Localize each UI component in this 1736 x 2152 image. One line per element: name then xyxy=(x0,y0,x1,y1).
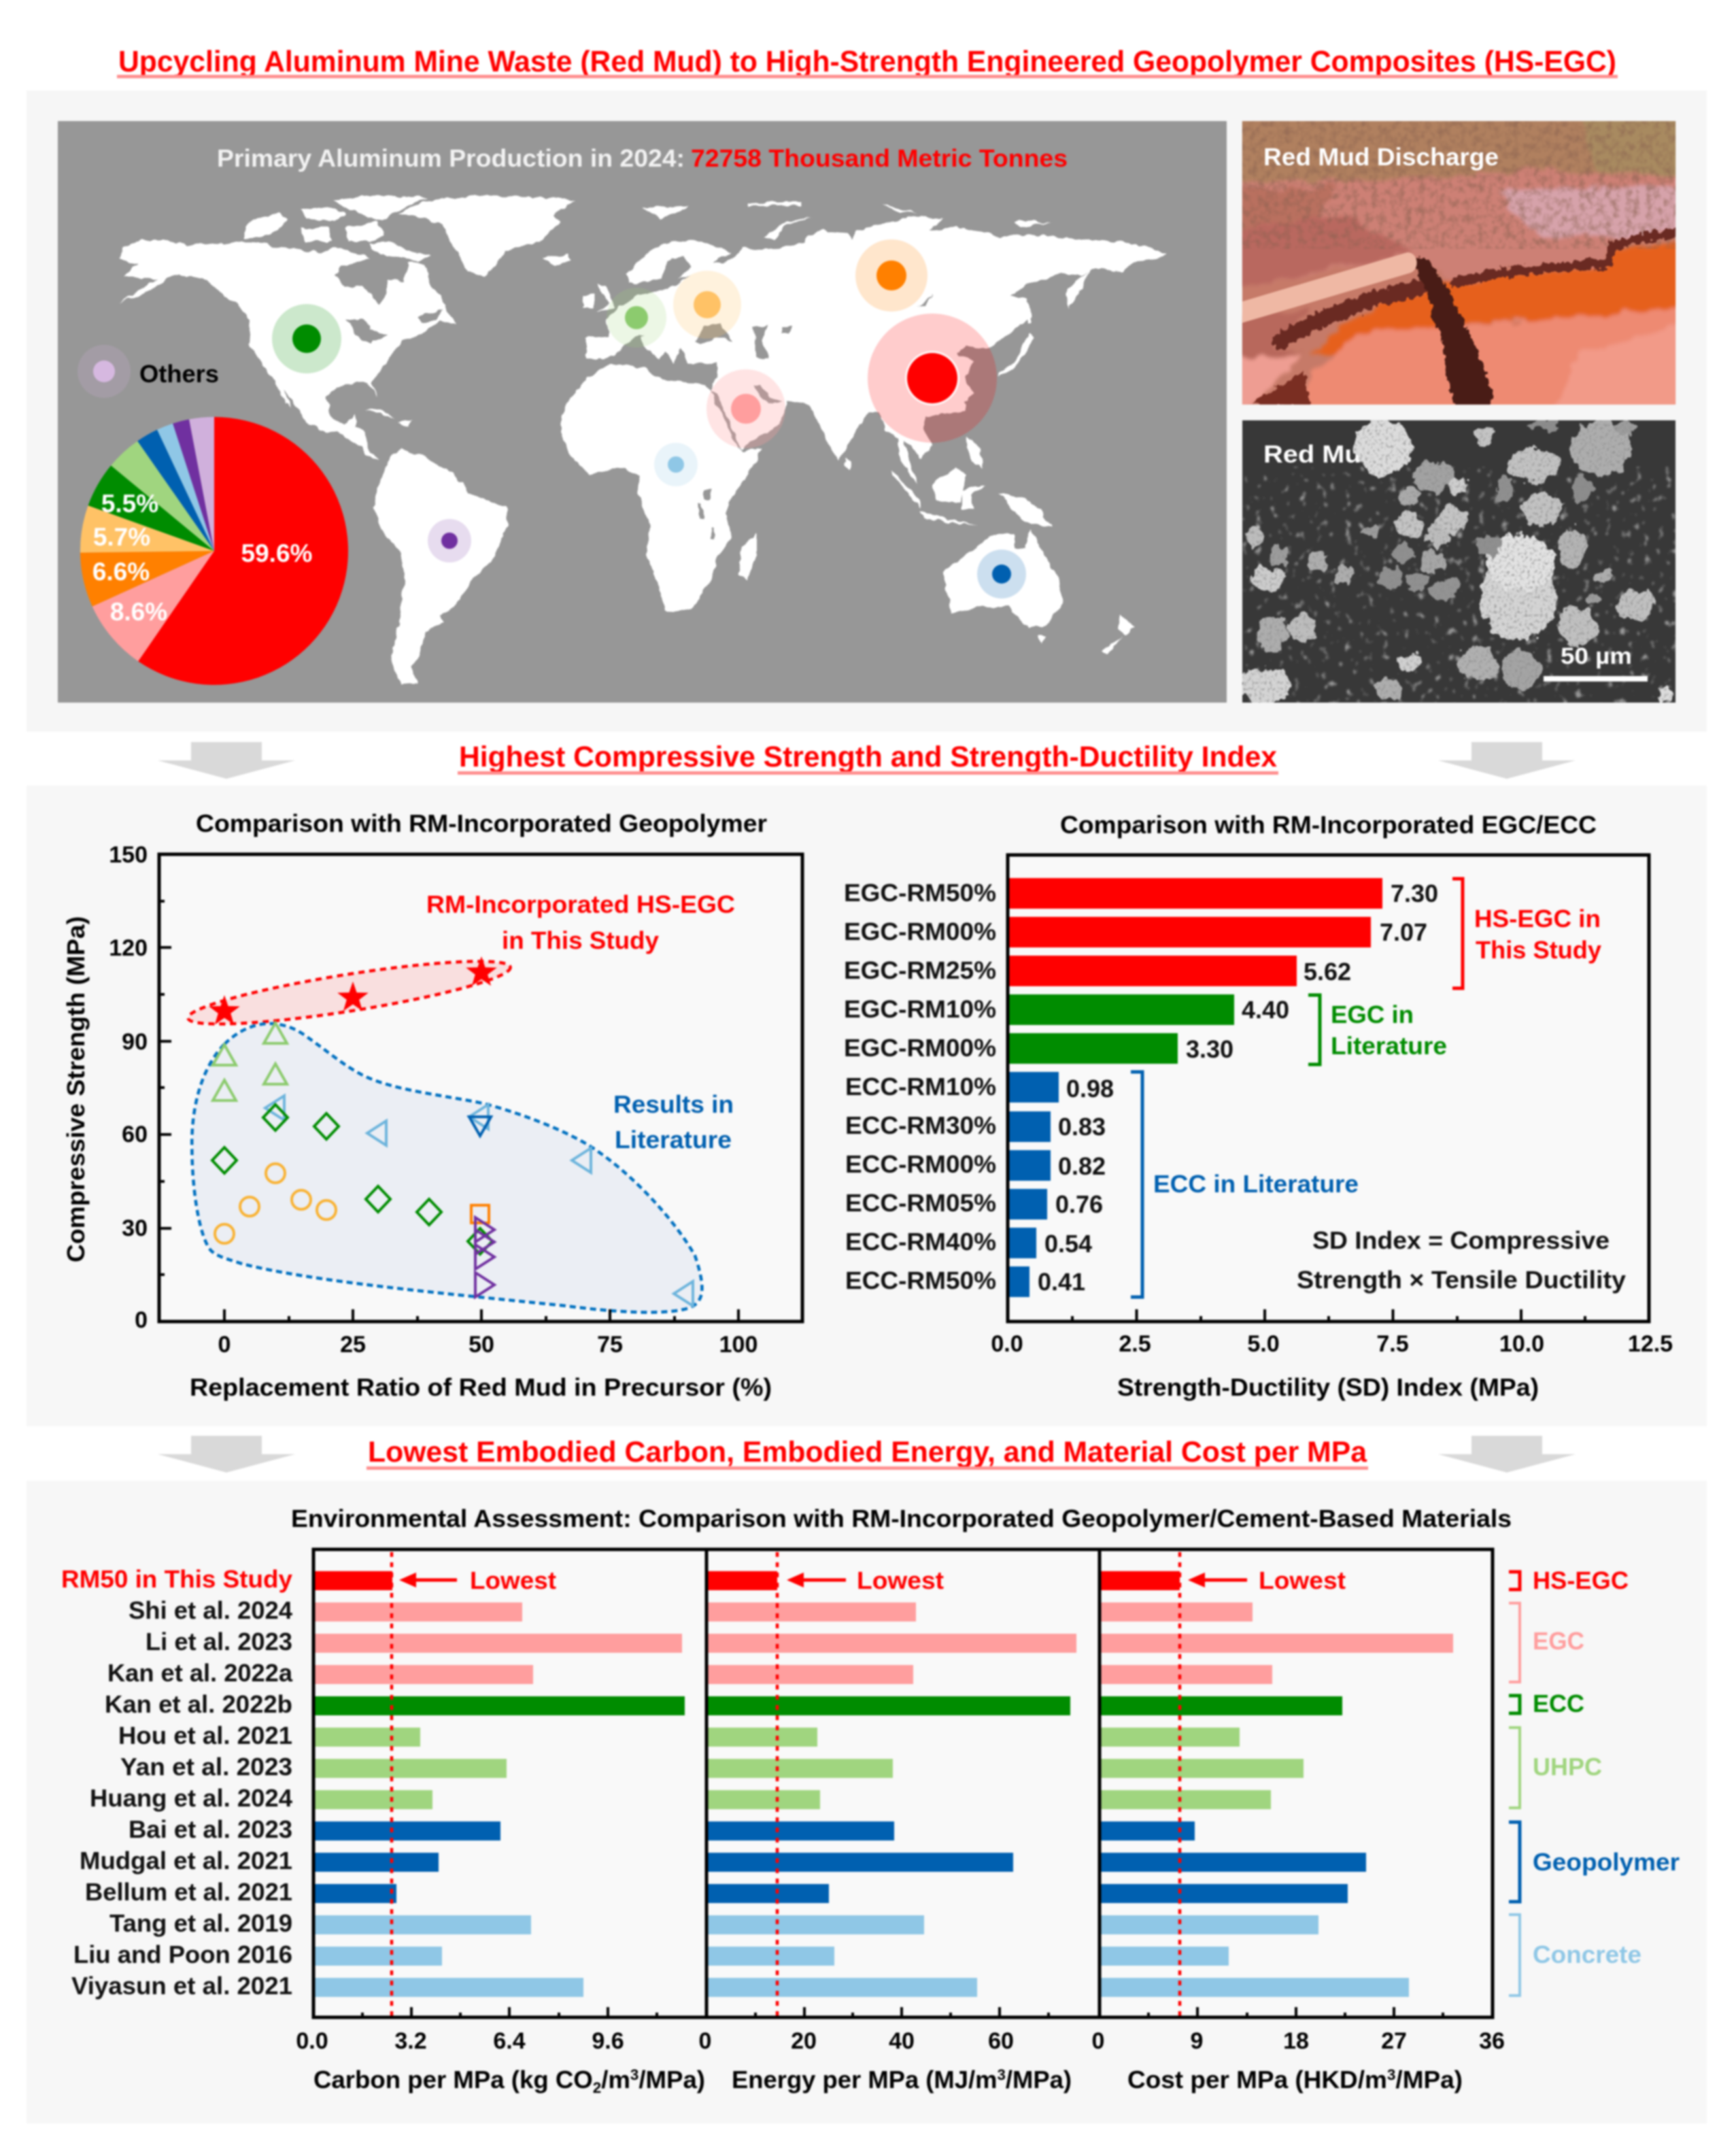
photo: red mud SEM micrograph xyxy=(1240,418,1675,706)
environmental tick labels: 40 xyxy=(889,2028,915,2054)
bar x tick labels: 5.0 xyxy=(1247,1331,1280,1357)
study labels: Huang et al. 2024 xyxy=(90,1784,292,1812)
group bracket: Geopolymer: Geopolymer xyxy=(1533,1848,1680,1876)
study labels xyxy=(61,1565,293,2000)
environmental tick labels: 36 xyxy=(1479,2028,1505,2054)
bar x tick labels xyxy=(991,1331,1673,1357)
marker: Brazil xyxy=(428,519,471,562)
axis title: carbon: Carbon per MPa (kg CO xyxy=(313,2066,588,2094)
bar category labels: EGC-RM00% xyxy=(844,918,996,945)
markers: diamonds xyxy=(212,1105,492,1254)
heading: strength: Highest Compressive Strength and Strength-Ductility Index xyxy=(459,741,1277,773)
annotation: this study: in This Study xyxy=(502,926,659,954)
map heading value: 72758 Thousand Metric Tonnes xyxy=(691,144,1068,172)
scatter y tick labels: 90 xyxy=(122,1029,148,1055)
environmental tick labels: 18 xyxy=(1283,2028,1309,2054)
bar category labels: ECC-RM10% xyxy=(845,1073,996,1100)
arrow: down right 2 xyxy=(1438,1436,1576,1473)
scatter y tick labels: 30 xyxy=(122,1215,148,1241)
photo: red mud discharge xyxy=(1240,120,1677,406)
bar category labels: EGC-RM00% xyxy=(844,1034,996,1062)
group bracket: ECC xyxy=(1509,1689,1584,1717)
bracket: HS-EGC group xyxy=(1452,879,1601,988)
title: Upcycling Aluminum Mine Waste (Red Mud) to High-Strength Engineered Geopolymer Composites (HS-EGC) xyxy=(118,45,1616,78)
study labels: Bellum et al. 2021 xyxy=(85,1878,292,1906)
bar category labels: ECC-RM50% xyxy=(845,1266,996,1294)
environmental tick labels: 9.6 xyxy=(592,2028,624,2054)
group bracket: Geopolymer xyxy=(1509,1822,1680,1902)
bar values: 0.82 xyxy=(1058,1152,1106,1180)
axis title: carbon: /m xyxy=(601,2066,630,2094)
world landmasses xyxy=(118,196,1166,686)
panel: mechanical comparison xyxy=(27,786,1707,1426)
environmental frame xyxy=(313,1549,1493,2017)
axis title: carbon: /MPa) xyxy=(639,2066,705,2094)
bar x tick labels: 12.5 xyxy=(1628,1331,1673,1357)
study labels: Tang et al. 2019 xyxy=(109,1909,292,1937)
study labels: Hou et al. 2021 xyxy=(118,1721,292,1749)
scatter x tick labels: 0 xyxy=(218,1332,231,1358)
red highlight ellipse xyxy=(185,949,513,1037)
pie label 8.6%: 8.6% xyxy=(110,598,167,626)
axis title: cost: 3 xyxy=(1387,2066,1395,2083)
marker: Russia xyxy=(855,239,927,312)
arrow: down left 1 xyxy=(158,742,295,779)
environmental tick labels: 60 xyxy=(988,2028,1014,2054)
map heading: Primary Aluminum Production in 2024: xyxy=(217,144,685,172)
study labels: Kan et al. 2022a xyxy=(107,1659,293,1687)
markers: circles xyxy=(215,1164,336,1243)
group bracket: EGC: EGC xyxy=(1533,1627,1584,1655)
environmental tick labels: 20 xyxy=(791,2028,817,2054)
marker: China xyxy=(868,314,997,443)
bar x tick labels: 2.5 xyxy=(1119,1331,1151,1357)
world map panel xyxy=(58,121,1227,703)
bar category labels: ECC-RM05% xyxy=(845,1189,996,1217)
group bracket: Concrete xyxy=(1509,1915,1641,1996)
bar values: 5.62 xyxy=(1304,958,1351,986)
arrow: down right 1 xyxy=(1438,742,1576,779)
bars: cost xyxy=(1100,1571,1453,1997)
bar x axis title: Strength-Ductility (SD) Index (MPa) xyxy=(1117,1373,1539,1401)
study labels: Bai et al. 2023 xyxy=(129,1815,292,1843)
study labels: Viyasun et al. 2021 xyxy=(71,1972,292,2000)
callout: lowest carbon xyxy=(399,1566,556,1594)
bar category labels: ECC-RM30% xyxy=(845,1111,996,1139)
marker: Africa xyxy=(654,443,698,486)
markers: left triangles xyxy=(265,1096,693,1306)
marker: down triangle xyxy=(469,1117,491,1136)
environmental tick labels: 0 xyxy=(1092,2028,1104,2054)
scatter chart xyxy=(62,809,802,1401)
callout: lowest energy: Lowest xyxy=(857,1566,944,1594)
axis title: energy: 3 xyxy=(998,2066,1006,2083)
bar category labels: ECC-RM00% xyxy=(845,1150,996,1178)
pie label 6.6%: 6.6% xyxy=(92,558,150,586)
scale bar xyxy=(1544,643,1648,682)
scatter y tick labels: 0 xyxy=(135,1307,148,1333)
bracket: ECC literature group: ECC in Literature xyxy=(1153,1170,1359,1198)
marker: Others legend xyxy=(78,345,219,398)
annotation: this study xyxy=(426,890,735,954)
study labels: Mudgal et al. 2021 xyxy=(80,1847,292,1874)
SD index note: Strength × Tensile Ductility xyxy=(1297,1266,1626,1294)
scatter title: Comparison with RM-Incorporated Geopolymer xyxy=(196,809,767,837)
bar x tick labels: 10.0 xyxy=(1499,1331,1544,1357)
bar values: 7.07 xyxy=(1380,918,1427,946)
markers: right triangles xyxy=(475,1217,494,1297)
bar values: 7.30 xyxy=(1391,879,1438,907)
bar values: 0.76 xyxy=(1055,1190,1103,1218)
bar values: 0.54 xyxy=(1044,1230,1092,1258)
scale bar: 50 µm xyxy=(1561,643,1632,669)
scatter y tick labels: 120 xyxy=(109,935,148,961)
bracket: EGC literature group: EGC in xyxy=(1331,1001,1414,1028)
group bracket: UHPC: UHPC xyxy=(1533,1753,1602,1781)
environmental tick labels xyxy=(296,2028,1505,2054)
scatter x tick labels: 75 xyxy=(597,1332,623,1358)
bars xyxy=(1008,878,1382,1297)
environmental tick labels: 6.4 xyxy=(493,2028,526,2054)
axis title: cost: /MPa) xyxy=(1395,2066,1463,2094)
photo: red mud discharge: Red Mud Discharge xyxy=(1263,143,1499,171)
study labels: Kan et al. 2022b xyxy=(105,1690,292,1718)
bracket: HS-EGC group: This Study xyxy=(1476,936,1601,964)
axis title: carbon: 2 xyxy=(593,2079,601,2096)
panel: environmental assessment xyxy=(27,1481,1707,2123)
axis title: energy: /MPa) xyxy=(1006,2066,1072,2094)
bar x tick labels: 7.5 xyxy=(1376,1331,1409,1357)
bar category labels: ECC-RM40% xyxy=(845,1228,996,1256)
scatter x tick labels: 100 xyxy=(719,1332,758,1358)
axis title: cost: Cost per MPa (HKD/m xyxy=(1127,2066,1380,2094)
annotation: literature: Literature xyxy=(615,1126,732,1154)
scatter x tick labels: 25 xyxy=(340,1332,366,1358)
marker: Australia xyxy=(977,550,1026,599)
bracket: EGC literature group xyxy=(1308,995,1447,1064)
markers: up triangles xyxy=(213,1023,287,1100)
bar chart title: Comparison with RM-Incorporated EGC/ECC xyxy=(1060,811,1597,839)
bar values: 0.83 xyxy=(1058,1113,1106,1141)
bar values: 0.41 xyxy=(1038,1268,1085,1296)
bar category labels: EGC-RM25% xyxy=(844,956,996,984)
marker: Europe xyxy=(607,288,666,348)
SD index note: SD Index = Compressive xyxy=(1312,1226,1610,1254)
bar chart frame xyxy=(1008,855,1649,1322)
bar category labels: EGC-RM50% xyxy=(844,879,996,907)
scatter axes frame xyxy=(159,854,802,1322)
lowest value dotted lines xyxy=(392,1552,1180,2017)
callout: lowest cost xyxy=(1188,1566,1346,1594)
marker: Middle East xyxy=(707,369,785,448)
marker: Others legend: Others xyxy=(139,360,219,388)
marker: USA xyxy=(272,304,341,373)
bracket: ECC literature group xyxy=(1131,1072,1359,1297)
study labels: Liu and Poon 2016 xyxy=(73,1940,292,1968)
bar values: 0.98 xyxy=(1066,1075,1114,1103)
study labels: Yan et al. 2023 xyxy=(120,1753,292,1781)
bar category labels: EGC-RM10% xyxy=(844,995,996,1023)
environmental tick labels: 27 xyxy=(1381,2028,1407,2054)
study labels: Li et al. 2023 xyxy=(146,1628,292,1655)
bar chart: SD index xyxy=(844,811,1673,1401)
bracket: HS-EGC group: HS-EGC in xyxy=(1474,905,1601,932)
literature region xyxy=(192,1024,702,1312)
group bracket: UHPC xyxy=(1509,1728,1602,1808)
SEM image label: Red Mud xyxy=(1263,440,1378,468)
bars: carbon xyxy=(313,1571,685,1997)
bars: energy xyxy=(707,1571,1076,1997)
heading: environmental: Lowest Embodied Carbon, Embodied Energy, and Material Cost per MPa xyxy=(368,1436,1367,1468)
pie label 5.7%: 5.7% xyxy=(93,523,150,551)
group bracket: Concrete: Concrete xyxy=(1533,1940,1641,1968)
scatter y tick labels: 150 xyxy=(109,842,148,868)
group bracket: HS-EGC: HS-EGC xyxy=(1533,1566,1629,1594)
environmental title: Environmental Assessment: Comparison with RM-Incorporated Geopolymer/Cement-Based Materials xyxy=(291,1504,1512,1532)
scatter x tick labels: 50 xyxy=(469,1332,494,1358)
study labels: Shi et al. 2024 xyxy=(129,1596,292,1624)
scatter y tick labels xyxy=(109,842,148,1333)
bar values: 4.40 xyxy=(1242,996,1289,1024)
bar values: 3.30 xyxy=(1186,1035,1233,1063)
scatter x axis title: Replacement Ratio of Red Mud in Precursor (%) xyxy=(190,1373,772,1401)
marker: Eastern Europe xyxy=(673,271,741,339)
environmental tick labels: 0.0 xyxy=(296,2028,328,2054)
scatter y axis title: Compressive Strength (MPa) xyxy=(62,916,90,1262)
SD index note xyxy=(1297,1226,1626,1294)
bracket: EGC literature group: Literature xyxy=(1331,1032,1447,1060)
group bracket: EGC xyxy=(1509,1603,1584,1682)
study labels: RM50 in This Study xyxy=(61,1565,292,1593)
scatter y tick labels: 60 xyxy=(122,1122,148,1147)
annotation: this study: RM-Incorporated HS-EGC xyxy=(426,890,735,918)
bar x tick labels: 0.0 xyxy=(991,1331,1023,1357)
pie chart xyxy=(80,417,348,685)
callout: lowest carbon: Lowest xyxy=(470,1566,556,1594)
arrow: down left 2 xyxy=(158,1436,295,1473)
marker: square xyxy=(471,1205,489,1223)
pie label 5.5%: 5.5% xyxy=(101,490,158,518)
environmental tick labels: 0 xyxy=(699,2028,711,2054)
annotation: literature: Results in xyxy=(613,1090,734,1118)
environmental tick labels: 3.2 xyxy=(394,2028,427,2054)
annotation: literature xyxy=(613,1090,734,1154)
callout: lowest energy xyxy=(787,1566,944,1594)
axis title: carbon: 3 xyxy=(630,2066,639,2083)
bar category labels xyxy=(844,879,996,1294)
callout: lowest cost: Lowest xyxy=(1259,1566,1346,1594)
axis title: energy: Energy per MPa (MJ/m xyxy=(732,2066,994,2094)
group bracket: ECC: ECC xyxy=(1533,1689,1584,1717)
panel: aluminum production xyxy=(27,90,1707,732)
environmental tick labels: 9 xyxy=(1191,2028,1203,2054)
pie label 59.6%: 59.6% xyxy=(241,539,312,567)
scatter x tick labels xyxy=(218,1332,758,1358)
stars: this study xyxy=(209,956,497,1024)
bar values xyxy=(1038,879,1438,1296)
